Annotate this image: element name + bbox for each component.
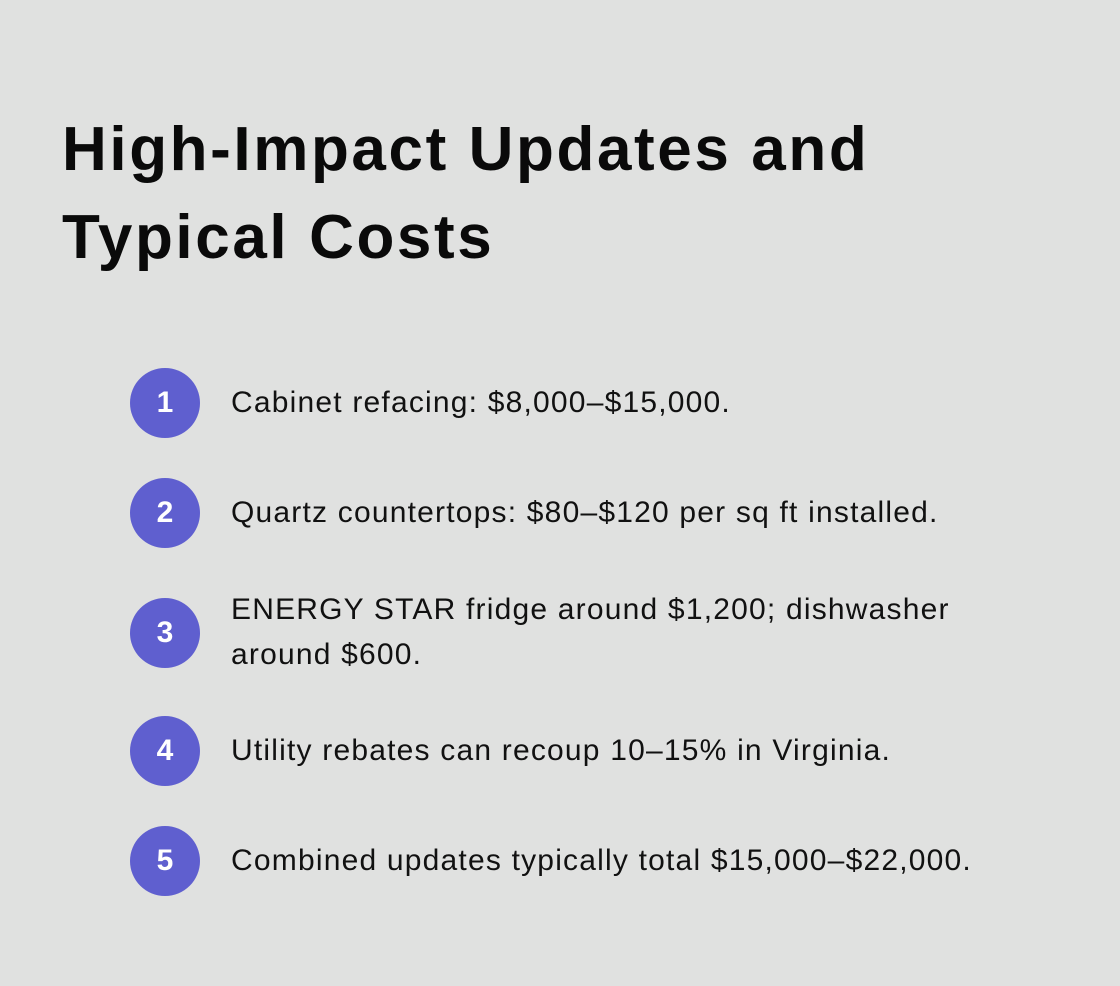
text 3: around $600. (231, 638, 422, 671)
text 2: Quartz countertops: $80–$120 per sq ft installed. (231, 496, 939, 529)
icon: number 2: 2 (157, 496, 173, 529)
icon: number 4: 4 (157, 734, 173, 767)
icon: number 2 (130, 478, 200, 548)
icon: number 5 (130, 826, 200, 896)
icon: number 4 (130, 716, 200, 786)
icon: number 3: 3 (157, 616, 173, 649)
title: Typical Costs (62, 203, 494, 272)
title: High-Impact Updates and (62, 115, 869, 184)
item 5 (130, 826, 972, 896)
icon: number 1: 1 (157, 386, 173, 419)
text 1: Cabinet refacing: $8,000–$15,000. (231, 386, 731, 419)
item 4 (130, 716, 891, 786)
icon: number 1 (130, 368, 200, 438)
icon: number 3 (130, 598, 200, 668)
text 3: ENERGY STAR fridge around $1,200; dishwasher (231, 593, 950, 626)
text 3 (231, 593, 950, 671)
text 5: Combined updates typically total $15,000–$22,000. (231, 844, 972, 877)
item 3 (130, 593, 950, 671)
item 1 (130, 368, 731, 438)
title (62, 115, 869, 272)
text 4: Utility rebates can recoup 10–15% in Virginia. (231, 734, 891, 767)
icon: number 5: 5 (157, 844, 173, 877)
item 2 (130, 478, 939, 548)
